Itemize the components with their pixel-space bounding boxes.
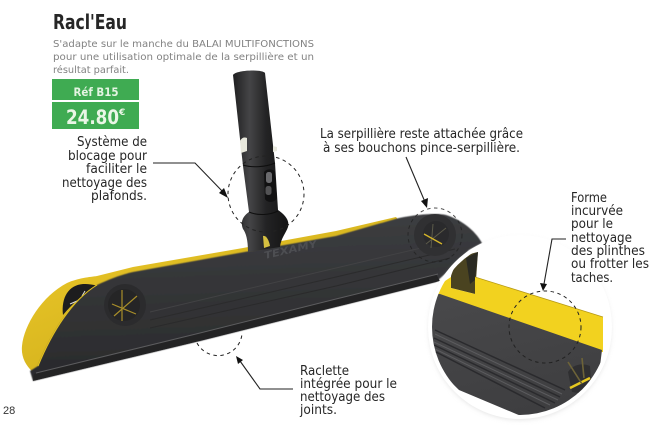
callout: curved shape: incurvée <box>571 204 623 219</box>
reference badge <box>52 79 139 100</box>
handle <box>233 71 288 252</box>
callout: locking system <box>62 135 148 204</box>
inset clip cap <box>568 364 591 393</box>
callout: curved shape: ou frotter les <box>571 257 649 272</box>
callout: curved shape <box>571 191 649 286</box>
callout: curved shape: des plinthes <box>571 244 645 259</box>
callout: integrated squeegee: nettoyage des <box>300 390 385 405</box>
callout: integrated squeegee: intégrée pour le <box>300 377 397 392</box>
price badge: 24.80 <box>66 106 119 129</box>
arrow: curved shape <box>540 239 566 291</box>
callout: curved shape: nettoyage <box>571 231 632 246</box>
arrow: integrated squeegee <box>236 356 293 389</box>
arrow: locking system <box>153 163 228 198</box>
price badge <box>52 102 139 129</box>
callout: integrated squeegee <box>299 364 397 418</box>
callout: curved shape: taches. <box>571 271 613 286</box>
inset yellow band <box>430 277 603 352</box>
callout: clip plugs: La serpillière reste attachée grâce <box>320 127 523 142</box>
dashed highlight circles <box>197 156 581 363</box>
product description <box>53 39 314 76</box>
product: squeegee attachment <box>22 71 482 381</box>
inset slot <box>451 252 478 294</box>
page number: 28 <box>3 405 15 417</box>
callout: integrated squeegee: Raclette <box>300 364 349 379</box>
callout: locking system: nettoyage des <box>62 176 147 191</box>
callout: locking system: Système de <box>77 135 147 150</box>
inset dark body <box>432 294 602 415</box>
inset ridges <box>434 330 565 408</box>
brand mark on blade: TEXAMY <box>263 239 320 262</box>
reference badge: Réf B15 <box>74 85 118 99</box>
product description: S'adapte sur le manche du BALAI MULTIFONCTIONS <box>53 39 314 50</box>
yellow inner edge <box>38 285 97 366</box>
inset detail circle <box>428 243 612 421</box>
price badge: € <box>118 108 125 118</box>
callout: integrated squeegee: joints. <box>299 403 337 418</box>
callout: curved shape: Forme <box>571 191 607 206</box>
product description: résultat parfait. <box>53 64 129 76</box>
callout: clip plugs <box>320 127 523 156</box>
rear cap <box>63 284 97 315</box>
title: Racl'Eau <box>53 10 127 34</box>
right clip cap <box>414 214 456 256</box>
callout: clip plugs: à ses bouchons pince-serpillière. <box>323 141 520 156</box>
callout: locking system: plafonds. <box>91 189 147 204</box>
blade ridges <box>33 240 455 381</box>
callout: locking system: blocage pour <box>68 149 148 164</box>
black blade body <box>30 214 482 381</box>
yellow back shell <box>22 217 405 372</box>
arrow: clip plugs <box>406 157 428 208</box>
callout: locking system: faciliter le <box>86 162 147 177</box>
product description: pour une utilisation optimale de la serpillière et un <box>53 51 314 63</box>
left clip cap <box>104 284 146 326</box>
callout: curved shape: pour le <box>571 217 613 232</box>
